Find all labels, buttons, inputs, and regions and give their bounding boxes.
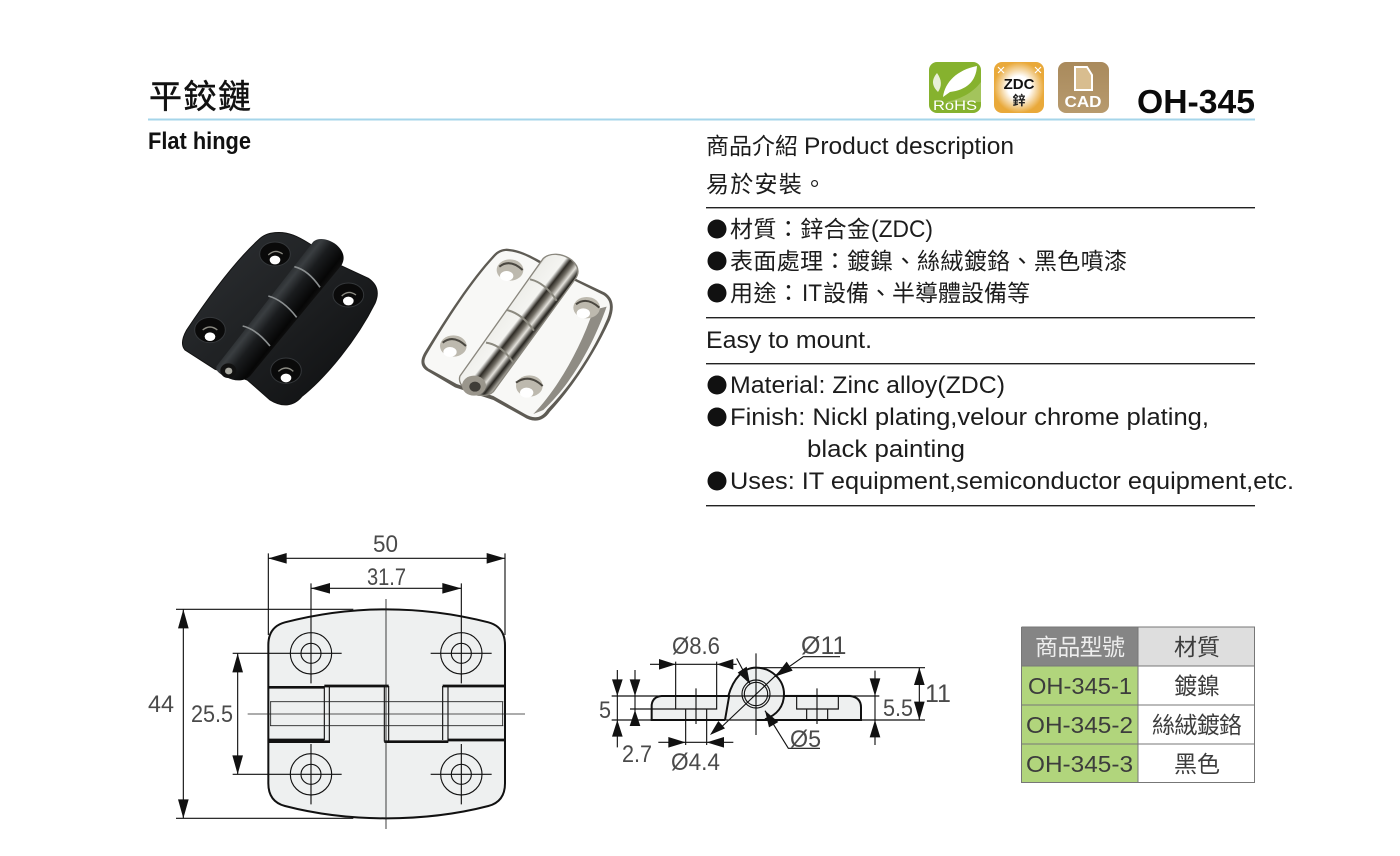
list: Chinese specs: 材質：鋅合金 [730,216,870,242]
dimension labels: side view: Ø4.4 [671,749,720,776]
divider 4 [706,505,1255,506]
model number: OH-345 [1137,83,1255,120]
dimension labels: side view: Ø8.6 [672,633,720,660]
table row 3: 黑色 [1174,751,1220,777]
table header row [1035,634,1220,660]
dimension labels: side view: Ø11 [801,632,846,660]
table header row: 材質 [1174,634,1220,660]
dimension labels: front view: 25.5 [191,701,233,728]
text: Chinese description: 易於安裝。 [706,171,826,197]
drawing: front view [148,531,525,829]
list: Chinese specs: 用途： [730,280,800,306]
list: English specs: Material: Zinc alloy(ZDC) [730,372,1005,399]
list: Chinese specs: 表面處理：鍍鎳、絲絨鍍鉻、黑色噴漆 [730,248,1127,274]
divider 2 [706,317,1255,318]
header rule [148,118,1255,120]
dimension labels: front view: 44 [148,691,174,718]
table row 2: 絲絨鍍鉻 [1152,712,1242,738]
list: Chinese specs: IT [802,280,822,307]
dimension labels: side view: 5 [599,697,611,724]
table row 1 [1028,673,1220,699]
list: English specs: black painting [807,436,965,463]
list: Chinese specs: (ZDC) [871,216,933,243]
text: Chinese description: Product description [804,133,1014,160]
icon: RoHS badge: RoHS [933,97,977,113]
text: Chinese description [706,133,1014,197]
text: Chinese description: 商品介紹 [706,133,798,159]
table row 1: OH-345-1 [1028,673,1132,699]
icon: ZDC zinc badge [994,62,1044,113]
icon: ZDC zinc badge: 鋅 [1012,93,1026,108]
table row 3: OH-345-3 [1026,751,1133,777]
subtitle: English product name: Flat hinge [148,128,251,155]
table: model list [1021,627,1255,782]
list: Chinese specs [708,216,1127,307]
table row 2 [1026,712,1242,738]
title: Chinese product name: 平鉸鏈 [149,78,251,115]
icon: RoHS badge [929,62,981,113]
text: English description: Easy to mount. [706,327,872,354]
divider 3 [706,363,1255,364]
dimension labels: side view [599,632,951,776]
dimension labels: front view: 50 [373,531,398,558]
dimension labels: front view: 31.7 [367,564,406,591]
photo: black hinge [182,232,377,405]
list: English specs: Finish: Nickl plating,velour chrome plating, [730,404,1209,431]
table row 2: OH-345-2 [1026,712,1133,738]
drawing: side view [599,632,951,776]
table row 3 [1026,751,1220,777]
table header row: 商品型號 [1035,634,1125,660]
dimension labels: side view: 11 [925,680,951,708]
photo: chrome hinge [421,249,613,421]
icon: CAD badge: CAD [1064,94,1102,111]
dimension labels: front view [148,531,406,728]
dimension labels: side view: 5.5 [883,695,913,722]
list: English specs: Uses: IT equipment,semiconductor equipment,etc. [730,468,1294,495]
icon: ZDC zinc badge: ZDC [1004,76,1035,93]
dimension labels: side view: 2.7 [622,741,652,768]
table row 1: 鍍鎳 [1174,673,1220,699]
list: English specs [708,372,1294,495]
divider 1 [706,207,1255,208]
dimension labels: side view: Ø5 [790,726,821,753]
list: Chinese specs: 設備、半導體設備等 [823,280,1030,306]
icon: CAD badge [1058,62,1109,113]
